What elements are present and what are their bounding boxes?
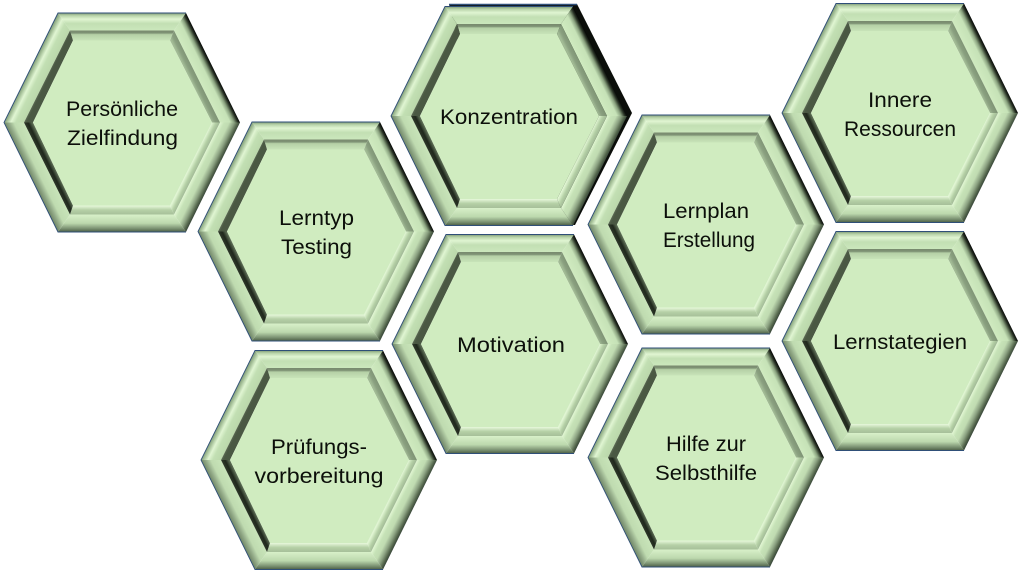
label: Lerntyp Testing: Lerntyp bbox=[279, 207, 354, 230]
label: Prüfungsvorbereitung bbox=[254, 436, 384, 488]
label: Lerntyp Testing: Testing bbox=[281, 236, 352, 259]
hexagon: Lernplan Erstellung bbox=[588, 115, 824, 334]
label: Hilfe zur Selbsthilfe: Selbsthilfe bbox=[655, 462, 757, 485]
label: Innere Ressourcen bbox=[844, 89, 956, 141]
label: Innere Ressourcen: Ressourcen bbox=[844, 118, 956, 141]
label: Lernplan Erstellung: Lernplan bbox=[663, 200, 749, 223]
label: Hilfe zur Selbsthilfe bbox=[655, 433, 757, 485]
label: Persönliche Zielfindung: Persönliche bbox=[66, 98, 178, 121]
hexagon: Prüfungsvorbereitung bbox=[201, 350, 437, 570]
label: Motivation: Motivation bbox=[457, 334, 565, 357]
hexagon: Motivation bbox=[392, 234, 628, 454]
label: Lernstategien: Lernstategien bbox=[833, 331, 967, 354]
label: Lernplan Erstellung: Erstellung bbox=[663, 229, 755, 252]
hexagon: Konzentration bbox=[391, 4, 632, 226]
label: Lernplan Erstellung bbox=[663, 200, 755, 252]
hexagon: Lernstategien bbox=[782, 232, 1018, 450]
hexagon: Lerntyp Testing bbox=[198, 122, 434, 341]
label: Innere Ressourcen: Innere bbox=[868, 89, 932, 112]
label: Prüfungsvorbereitung: vorbereitung bbox=[254, 465, 384, 488]
label: Prüfungsvorbereitung: Prüfungs- bbox=[271, 436, 367, 459]
label: Persönliche Zielfindung bbox=[66, 98, 178, 150]
label: Lerntyp Testing bbox=[279, 207, 354, 259]
label: Persönliche Zielfindung: Zielfindung bbox=[67, 127, 178, 150]
hexagon: Innere Ressourcen bbox=[782, 4, 1018, 222]
label: Konzentration: Konzentration bbox=[440, 106, 578, 129]
hexagon: Hilfe zur Selbsthilfe bbox=[588, 348, 824, 567]
hexagon: Persönliche Zielfindung bbox=[4, 13, 240, 232]
label: Hilfe zur Selbsthilfe: Hilfe zur bbox=[666, 433, 746, 456]
